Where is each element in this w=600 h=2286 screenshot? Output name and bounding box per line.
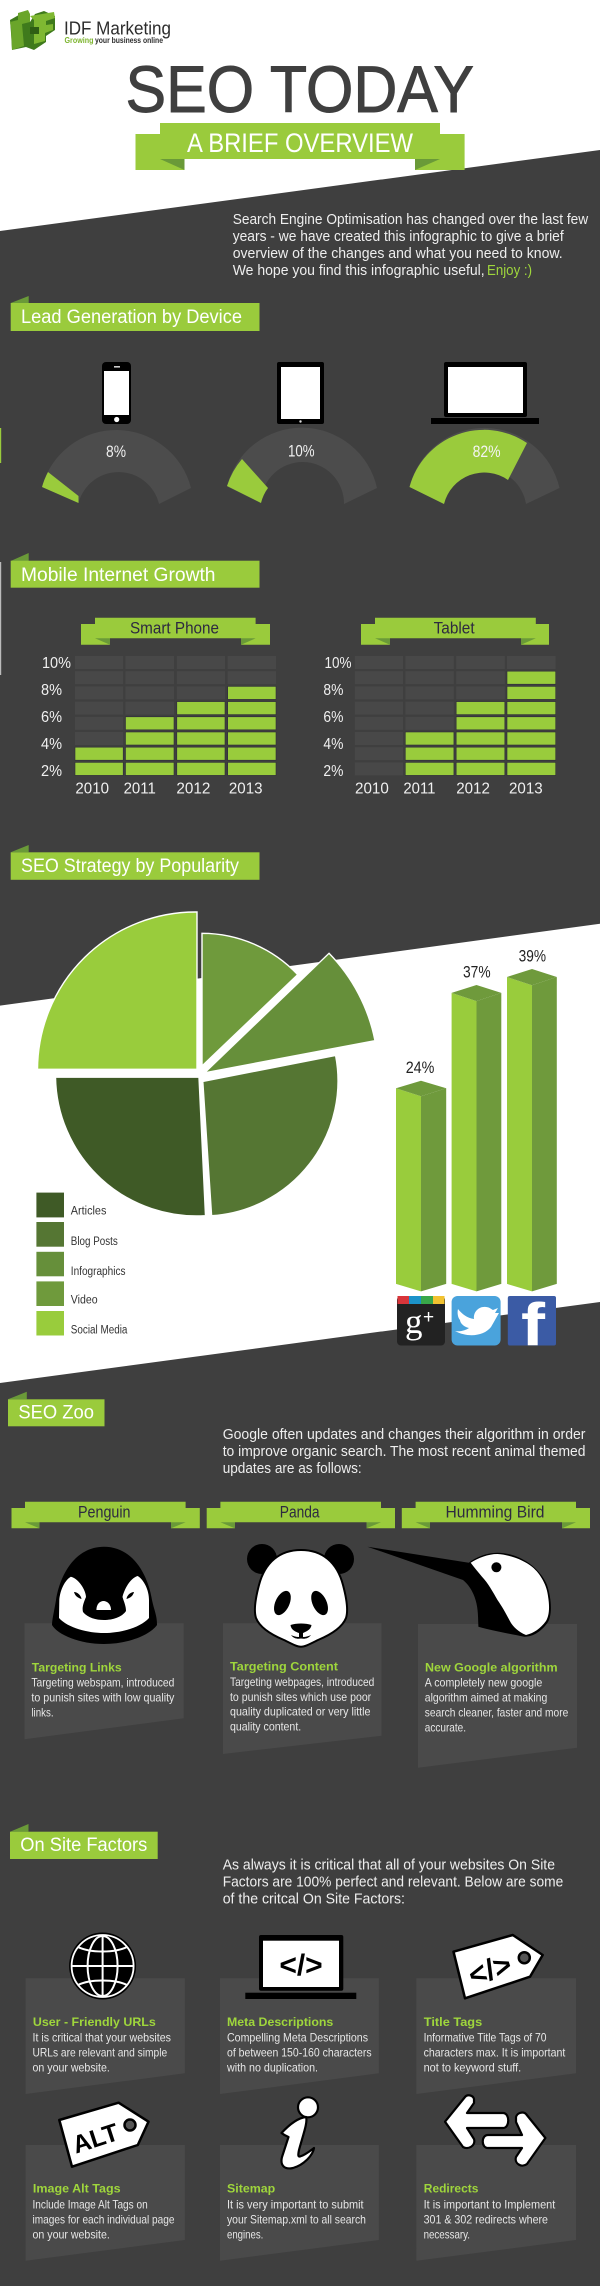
legend: Infographics — [71, 1266, 126, 1278]
intro text — [233, 211, 588, 279]
chart: Tablet growth: 2% — [323, 763, 343, 780]
panel: Title Tags: Title Tags — [424, 2017, 482, 2029]
heading: SEO Zoo — [8, 1392, 104, 1426]
SEO Zoo intro text — [223, 1426, 585, 1477]
panel: User - Friendly URLs — [26, 1978, 185, 2094]
ribbon: Tablet: Tablet — [434, 618, 475, 638]
panel: Penguin — [24, 1623, 184, 1739]
On Site Factors intro text: of the critcal On Site Factors: — [223, 1890, 405, 1907]
legend: Blog Posts — [71, 1236, 118, 1248]
ribbon: Humming Bird: Humming Bird — [446, 1502, 544, 1522]
legend: Social Media — [71, 1324, 128, 1336]
subtitle ribbon: A BRIEF OVERVIEW — [187, 128, 413, 158]
panel: Meta Descriptions: of between 150-160 characters — [227, 2046, 372, 2060]
panel: Humming Bird: New Google algorithm — [425, 1663, 558, 1675]
On Site Factors intro text: As always it is critical that all of your websites On Site — [223, 1856, 555, 1873]
icon: redirect arrows — [445, 2095, 545, 2166]
panel: Penguin: links. — [31, 1706, 54, 1720]
chart: Smart Phone growth: 2011 — [124, 780, 156, 797]
bar: 24%: 24% — [406, 1058, 434, 1077]
panel: User - Friendly URLs: URLs are relevant and simple — [32, 2046, 168, 2060]
icon: laptop with code — [245, 1935, 356, 1999]
panel: Sitemap: engines. — [227, 2227, 263, 2241]
panel: User - Friendly URLs: on your website. — [32, 2061, 110, 2075]
panel: Meta Descriptions: Compelling Meta Descriptions — [227, 2031, 368, 2045]
panel: Image Alt Tags — [26, 2145, 185, 2261]
icon: globe — [69, 1932, 136, 2000]
panel: Humming Bird: A completely new google — [425, 1676, 543, 1690]
chart: Smart Phone growth: 2012 — [176, 780, 210, 797]
icon: Twitter — [452, 1296, 501, 1346]
panel: Title Tags: characters max. It is important — [424, 2046, 566, 2060]
panel: Image Alt Tags: on your website. — [32, 2227, 110, 2241]
panel: User - Friendly URLs: It is critical that your websites — [32, 2031, 171, 2045]
chart: Tablet growth: 2010 — [355, 780, 389, 797]
icon: phone — [102, 362, 131, 424]
ribbon: Tablet — [361, 618, 549, 645]
icon: title tag: </> — [464, 1948, 516, 1993]
icon: laptop with code: </> — [279, 1949, 323, 1982]
icon: panda — [247, 1544, 354, 1647]
ribbon: Panda: Panda — [280, 1502, 320, 1522]
icon: Facebook: f — [521, 1292, 546, 1358]
heading: SEO Zoo: SEO Zoo — [18, 1402, 94, 1424]
panel: Sitemap: It is very important to submit — [227, 2197, 364, 2211]
gauge: 82% — [410, 428, 560, 504]
logo: IDF Marketing: IDF Marketing — [64, 18, 171, 38]
panel: User - Friendly URLs: User - Friendly URLs — [33, 2017, 156, 2029]
icon: Google Plus: + — [423, 1307, 434, 1328]
panel: Penguin: to punish sites with low quality — [31, 1691, 174, 1705]
panel: Redirects: Redirects — [424, 2184, 478, 2196]
heading: SEO Strategy by Popularity — [11, 845, 260, 880]
heading: Mobile Internet Growth: Mobile Internet Growth — [21, 565, 216, 586]
heading: Mobile Internet Growth — [11, 553, 260, 588]
panel: Panda: quality content. — [230, 1720, 301, 1734]
logo: IDF Marketing — [10, 10, 171, 50]
legend — [36, 1193, 128, 1336]
chart: Tablet growth: 2012 — [456, 780, 490, 797]
chart: Tablet growth — [323, 655, 556, 797]
ribbon: Panda — [207, 1502, 395, 1528]
chart: Smart Phone growth: 10% — [42, 655, 71, 672]
panel: Title Tags — [416, 1978, 576, 2094]
chart: Smart Phone growth — [41, 655, 276, 797]
panel: Sitemap: Sitemap — [227, 2184, 275, 2196]
ribbon: Smart Phone — [81, 618, 270, 645]
ribbon: Smart Phone: Smart Phone — [130, 618, 219, 638]
panel: Sitemap: your Sitemap.xml to all search — [227, 2212, 366, 2226]
gauge: 82%: 82% — [473, 442, 501, 461]
gauge: 8% — [42, 430, 191, 504]
subtitle ribbon — [136, 123, 465, 170]
bar: 39%: 39% — [519, 946, 546, 966]
panel: Panda: Targeting Content — [230, 1662, 338, 1674]
gauge: 10% — [227, 428, 377, 504]
intro text: years - we have created this infographic to give a brief — [233, 228, 564, 245]
panel: Redirects — [416, 2145, 576, 2261]
panel: Panda: to punish sites which use poor — [230, 1690, 371, 1704]
panel: Title Tags: not to keyword stuff. — [424, 2061, 521, 2075]
panel: Panda: Targeting webpages, introduced — [230, 1675, 374, 1689]
heading: Lead Generation by Device — [11, 296, 260, 331]
panel: Humming Bird: algorithm aimed at making — [425, 1691, 547, 1705]
panel: Image Alt Tags: Include Image Alt Tags on — [32, 2197, 148, 2211]
panel: Sitemap — [220, 2145, 379, 2261]
icon: alt tag — [59, 2103, 148, 2167]
chart: Smart Phone growth: 8% — [41, 682, 62, 699]
panel: Title Tags: Informative Title Tags of 70 — [424, 2031, 547, 2045]
icon: penguin — [52, 1547, 157, 1644]
intro text: We hope you find this infographic useful, — [233, 262, 485, 279]
ribbon: Humming Bird — [402, 1502, 590, 1528]
panel: Meta Descriptions — [220, 1978, 379, 2094]
panel: Panda — [223, 1623, 382, 1754]
icon: info — [281, 2097, 318, 2168]
ribbon: Penguin — [12, 1502, 200, 1528]
panel: Penguin: Targeting webspam, introduced — [31, 1676, 174, 1690]
heading: SEO Strategy by Popularity: SEO Strategy by Popularity — [21, 856, 239, 877]
intro text: overview of the changes and what you need to know. — [233, 245, 563, 262]
chart: Tablet growth: 6% — [323, 709, 343, 726]
chart: Tablet growth: 10% — [324, 655, 352, 672]
chart: Tablet growth: 8% — [323, 682, 343, 699]
chart: Tablet growth: 2013 — [509, 780, 543, 797]
chart: Tablet growth: 2011 — [403, 780, 435, 797]
icon: title tag — [454, 1935, 543, 1998]
On Site Factors intro text — [223, 1856, 563, 1907]
SEO Zoo intro text: updates are as follows: — [223, 1460, 362, 1477]
bar: 37%: 37% — [463, 962, 491, 981]
panel: Panda: quality duplicated or very little — [230, 1705, 371, 1719]
panel: Redirects: necessary. — [424, 2227, 470, 2241]
chart: Smart Phone growth: 2010 — [75, 780, 109, 797]
legend: Video — [71, 1294, 98, 1306]
ribbon: Penguin: Penguin — [78, 1502, 130, 1522]
logo: IDF Marketing: your business online — [95, 35, 163, 45]
bar: 37% — [452, 962, 501, 1291]
panel: Humming Bird: accurate. — [425, 1721, 466, 1735]
SEO Zoo intro text: Google often updates and changes their algorithm in order — [223, 1426, 585, 1443]
icon: Facebook — [508, 1292, 556, 1358]
icon: humming bird — [367, 1547, 551, 1637]
heading: On Site Factors — [10, 1824, 158, 1859]
chart: Smart Phone growth: 2% — [41, 763, 62, 780]
panel: Image Alt Tags: Image Alt Tags — [33, 2184, 121, 2196]
gauge: 8%: 8% — [106, 442, 126, 461]
icon: Google Plus — [397, 1296, 445, 1346]
intro text: Enjoy :) — [487, 262, 532, 279]
panel: Redirects: It is important to Implement — [424, 2197, 556, 2211]
logo: IDF Marketing: Growing — [64, 35, 94, 45]
icon: Google Plus: g — [405, 1302, 422, 1341]
gauge: 10%: 10% — [288, 442, 315, 461]
On Site Factors intro text: Factors are 100% perfect and relevant. Below are some — [223, 1873, 563, 1890]
panel: Image Alt Tags: images for each individual page — [32, 2212, 175, 2226]
icon: alt tag: ALT — [69, 2118, 122, 2159]
panel: Penguin: Targeting Links — [32, 1663, 122, 1675]
bar: 39% — [507, 946, 557, 1291]
chart: Smart Phone growth: 6% — [41, 709, 62, 726]
panel: Humming Bird: search cleaner, faster and more — [425, 1706, 569, 1720]
pie chart — [38, 912, 375, 1216]
icon: tablet — [277, 362, 324, 424]
chart: Smart Phone growth: 2013 — [229, 780, 263, 797]
heading: Lead Generation by Device: Lead Generation by Device — [21, 307, 242, 328]
chart: Tablet growth: 4% — [323, 736, 343, 753]
panel: Meta Descriptions: with no duplication. — [226, 2061, 318, 2075]
panel: Redirects: 301 & 302 redirects where — [424, 2212, 548, 2226]
legend: Articles — [71, 1206, 107, 1218]
icon: laptop — [431, 362, 539, 424]
chart: Smart Phone growth: 4% — [41, 736, 62, 753]
bar: 24% — [396, 1058, 446, 1291]
panel: Humming Bird — [418, 1624, 577, 1768]
heading: On Site Factors: On Site Factors — [20, 1835, 147, 1856]
panel: Meta Descriptions: Meta Descriptions — [227, 2017, 333, 2029]
title: SEO TODAY — [126, 53, 474, 126]
